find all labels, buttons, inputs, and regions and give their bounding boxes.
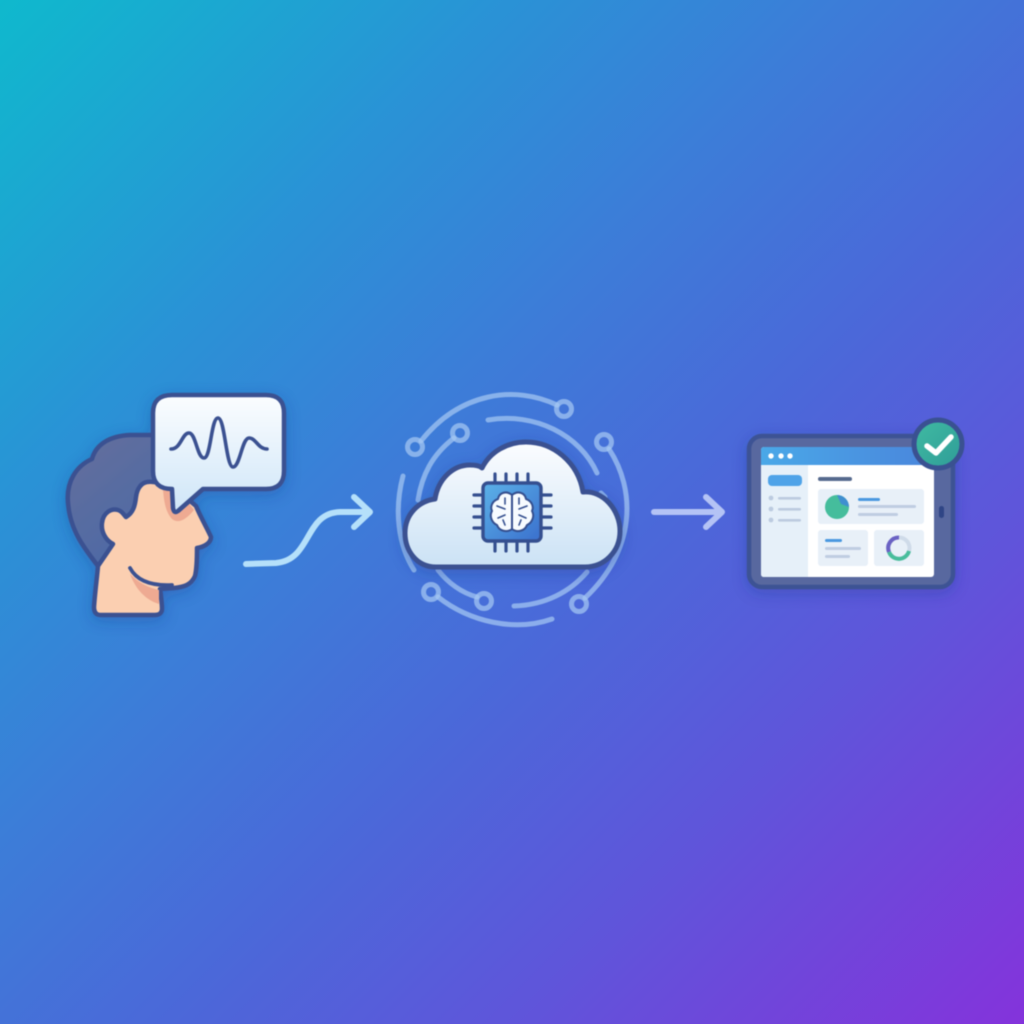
- title bar: [761, 447, 934, 465]
- voice waveform: [171, 418, 267, 467]
- neck shading: [130, 574, 159, 604]
- face and neck: [94, 482, 211, 615]
- circuit rings: [398, 395, 627, 625]
- cloud: [405, 442, 620, 567]
- hair: [68, 435, 165, 566]
- card: donut chart: [874, 530, 924, 566]
- icon: cloud with AI chip: [405, 442, 620, 567]
- screen: [761, 447, 934, 577]
- tablet frame: [749, 436, 953, 587]
- chip body: [483, 483, 541, 541]
- dashboard heading: [818, 477, 852, 481]
- sidebar: [761, 465, 808, 577]
- check badge: [914, 420, 962, 468]
- speech bubble: [153, 395, 284, 512]
- brain: [491, 492, 533, 531]
- icon: person speaking: [68, 395, 284, 615]
- mouth line: [130, 568, 172, 585]
- card: text lines: [818, 530, 868, 566]
- home button: [939, 506, 944, 518]
- chip pins: [474, 474, 551, 551]
- icon: tablet dashboard: [749, 420, 962, 587]
- cheek shading: [163, 490, 194, 521]
- arrow: speech to cloud: [246, 497, 370, 564]
- arrow: cloud to tablet: [654, 497, 722, 527]
- card: pie chart: [818, 489, 924, 524]
